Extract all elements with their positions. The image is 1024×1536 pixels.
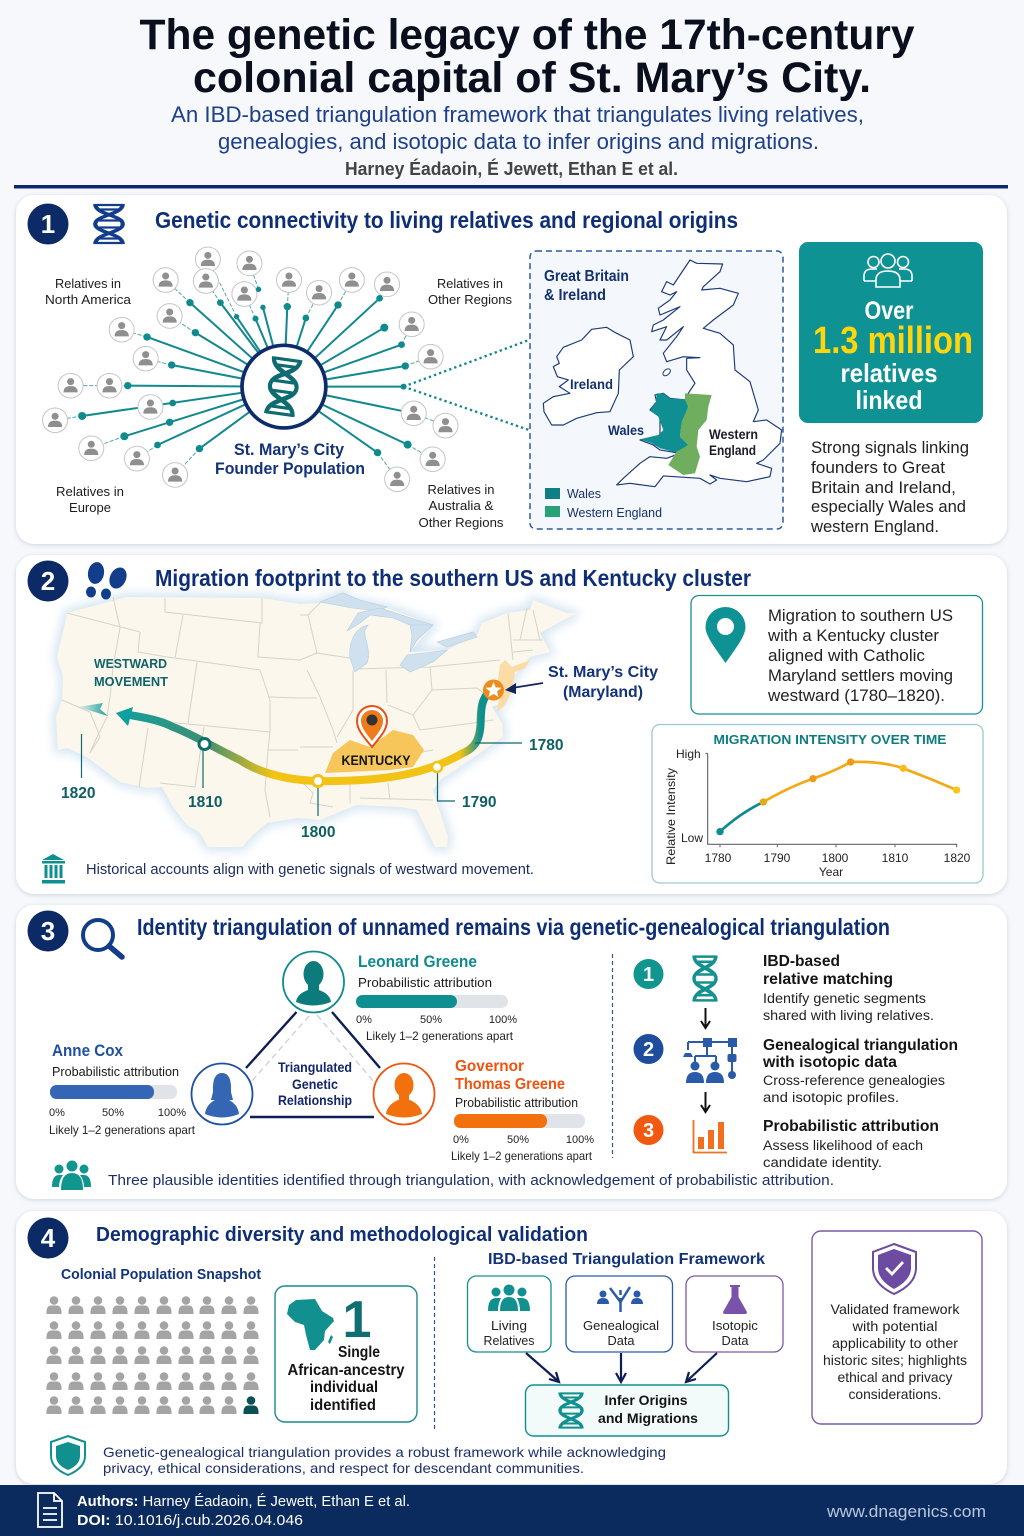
chart axis labels: 1810 (882, 851, 909, 865)
step 3 badge (634, 1115, 664, 1145)
heading 4: Demographic diversity and methodological validation (96, 1223, 588, 1246)
westward label (94, 657, 168, 689)
callout text: westward (1780–1820). (767, 687, 945, 705)
map legend (545, 487, 662, 520)
St Mary's City label: (Maryland) (563, 684, 643, 701)
candidate: Governor Thomas Greene: Thomas Greene (455, 1076, 565, 1093)
triangle label: Triangulated (278, 1059, 352, 1075)
founder label: St. Mary’s City (234, 440, 345, 459)
icon: teal dna (694, 956, 716, 1002)
label: Europe: Europe (69, 500, 111, 515)
step 1 text (763, 953, 934, 1023)
header (140, 11, 915, 179)
triangle label: Genetic (292, 1076, 338, 1092)
leader lines (82, 734, 522, 816)
stat text: linked (856, 385, 922, 415)
portrait: Anne Cox (192, 1064, 252, 1124)
finding text 1: western England. (810, 518, 939, 536)
icon: magnifier (83, 920, 122, 957)
icon: location pin (706, 607, 746, 663)
citation: Authors: Harney Éadaoin, É Jewett, Ethan E et al. (77, 1493, 410, 1510)
stat card (799, 242, 983, 423)
arrow to St Mary's City (512, 683, 543, 688)
step 2 text (762, 1037, 958, 1105)
icon: shield check (873, 1244, 916, 1294)
heading 1: Genetic connectivity to living relatives and regional origins (155, 207, 738, 233)
map labels (570, 376, 644, 438)
label: Australia: Other Regions (418, 515, 504, 530)
footer (0, 1485, 1024, 1536)
validation text: ethical and privacy (838, 1370, 953, 1385)
citation: DOI: 10.1016/j.cub.2026.04.046 (77, 1513, 303, 1529)
stat text (813, 297, 973, 415)
steps (634, 953, 958, 1170)
box: isotopic data: Data (722, 1334, 749, 1348)
validation text: Validated framework (830, 1302, 960, 1317)
candidate: Anne Cox: 100% (158, 1107, 186, 1119)
chart axis labels: 1790 (764, 851, 791, 865)
icon: bar chart (694, 1120, 727, 1152)
map: United States (56, 593, 577, 847)
step 2 text: Cross-reference genealogies (763, 1073, 945, 1088)
stat text: relatives (840, 358, 938, 388)
label: North America (45, 276, 132, 307)
label: Australia (418, 482, 504, 530)
icon: document (38, 1493, 62, 1527)
title: colonial capital of St. Mary’s City. (193, 54, 871, 102)
candidate: Anne Cox (49, 1042, 196, 1137)
validation text (823, 1302, 967, 1402)
icon: group (52, 1160, 91, 1190)
validation text: applicability to other (832, 1336, 958, 1351)
number badge 1 (28, 204, 68, 244)
founder label: Founder Population (215, 459, 365, 478)
subtitle: genealogies, and isotopic data to infer origins and migrations. (218, 129, 819, 154)
subtitle (171, 102, 864, 154)
network diagram (43, 247, 529, 492)
step 2 badge: 2 (643, 1039, 654, 1061)
candidate: Governor Thomas Greene: Probabilistic attribution (455, 1096, 578, 1110)
step 1 badge (634, 959, 664, 989)
validation text: historic sites; highlights (823, 1353, 967, 1368)
map: Great Britain and Ireland (530, 251, 783, 529)
icon: teal shield (51, 1436, 85, 1475)
down arrow 1 (701, 1008, 710, 1028)
great lakes (320, 593, 477, 672)
number badge 3 (28, 910, 68, 952)
heading 2: Migration footprint to the southern US and Kentucky cluster (155, 565, 751, 591)
closing note: Genetic-genealogical triangulation provides a robust framework while acknowledging (103, 1444, 666, 1460)
finding text 1: Britain and Ireland, (811, 479, 956, 497)
portrait: Leonard Greene (283, 952, 344, 1012)
step 3 badge: 3 (643, 1120, 654, 1142)
step 3 text: candidate identity. (763, 1155, 882, 1170)
callout text (767, 607, 953, 705)
box: infer origins: and Migrations (598, 1410, 698, 1426)
chart axis labels (664, 747, 971, 879)
title: The genetic legacy of the 17th-century (140, 11, 915, 59)
kentucky label: KENTUCKY (342, 752, 411, 768)
icon: star marker (483, 680, 504, 700)
number badge 3: 3 (41, 916, 55, 946)
callout text: Maryland settlers moving (768, 667, 953, 685)
callout: migration (691, 596, 982, 714)
callout text: aligned with Catholic (768, 647, 925, 665)
kentucky state (325, 730, 424, 773)
candidate: Governor Thomas Greene: Governor (455, 1058, 524, 1075)
chart axis labels: 1780 (705, 851, 732, 865)
callout text: Single (338, 1344, 380, 1361)
callout text: with a Kentucky cluster (767, 627, 940, 645)
big number one: 1 (343, 1291, 371, 1349)
year labels (61, 737, 563, 841)
label: Europe (56, 484, 124, 515)
number badge 1: 1 (41, 209, 55, 239)
icon: footprints (86, 561, 130, 600)
step 3 text (763, 1118, 939, 1170)
portrait: Governor Thomas Greene (374, 1064, 434, 1124)
box: living relatives (468, 1276, 551, 1352)
panel 2: migration (16, 555, 1007, 894)
number badge 2 (28, 560, 68, 602)
candidate: Governor Thomas Greene: 0% (453, 1134, 469, 1146)
label: Other Regions: Other Regions (428, 292, 512, 307)
map labels: Wales (608, 422, 644, 438)
candidate: Anne Cox: Likely 1–2 generations apart (49, 1123, 196, 1137)
step 1 text: relative matching (763, 971, 893, 988)
box: living relatives: Living (491, 1319, 527, 1333)
step 1 badge: 1 (643, 964, 654, 986)
route nodes (199, 738, 442, 786)
map legend: Wales (567, 487, 601, 501)
map title: & Ireland (544, 287, 606, 304)
step 2 text: Genealogical triangulation (763, 1037, 958, 1054)
label: Other Regions: Relatives in (437, 276, 503, 291)
triangulation note: Three plausible identities identified through triangulation, with acknowledgement of probabilistic attribution. (108, 1172, 834, 1189)
step 1 text: shared with living relatives. (763, 1008, 934, 1023)
candidate: Anne Cox: Probabilistic attribution (52, 1065, 179, 1079)
candidate: Anne Cox: 0% (49, 1107, 65, 1119)
closing note: privacy, ethical considerations, and respect for descendant communities. (103, 1460, 584, 1476)
number badge 4 (28, 1218, 68, 1258)
box: genealogical data: Genealogical (583, 1319, 659, 1333)
stat text: 1.3 million (813, 320, 973, 362)
subtitle: An IBD-based triangulation framework that triangulates living relatives, (171, 102, 864, 127)
down arrow 2 (701, 1092, 710, 1112)
label: Australia: Relatives in (428, 482, 494, 497)
candidate: Governor Thomas Greene (451, 1058, 594, 1163)
line chart: migration intensity (652, 724, 983, 883)
framework title: IBD-based Triangulation Framework (488, 1251, 765, 1268)
year labels: 1780 (529, 737, 563, 754)
triangle label (278, 1059, 352, 1108)
number badge 4: 4 (41, 1223, 56, 1253)
map title (544, 268, 629, 304)
panel 4: demographic diversity (16, 1211, 1007, 1484)
panel 1: genetic connectivity (16, 195, 1007, 544)
westward label: WESTWARD (94, 657, 167, 671)
box: infer origins: Infer Origins (604, 1392, 688, 1408)
step 2 text: with isotopic data (762, 1054, 897, 1071)
map title: Great Britain (544, 268, 629, 285)
maryland region (497, 660, 530, 712)
validation text: with potential (851, 1319, 938, 1334)
icon: museum (42, 854, 65, 884)
founder label (215, 440, 365, 478)
callout: validated framework (812, 1231, 982, 1424)
candidate: Governor Thomas Greene: 50% (507, 1134, 529, 1146)
snapshot title: Colonial Population Snapshot (61, 1267, 261, 1283)
map: Great Britain and Ireland: England (709, 443, 756, 458)
title (140, 11, 915, 102)
icon: family tree (683, 1038, 737, 1083)
candidate: Leonard Greene (356, 953, 517, 1043)
candidate: Governor Thomas Greene: Likely 1–2 generations apart (451, 1149, 593, 1163)
authors: Harney Éadaoin, É Jewett, Ethan E et al. (345, 158, 678, 179)
flow diagram: framework (468, 1251, 783, 1436)
box: genealogical data: Data (608, 1334, 635, 1348)
icon: people (864, 254, 912, 287)
finding text 1: Strong signals linking (811, 439, 969, 457)
triangle label: Relationship (278, 1092, 352, 1108)
candidate: Leonard Greene: Likely 1–2 generations apart (366, 1029, 514, 1043)
callout: African ancestry (275, 1286, 417, 1422)
pictogram: population (46, 1296, 259, 1414)
arrows into inference (526, 1353, 717, 1382)
map labels: Ireland (570, 376, 613, 392)
callout text: Migration to southern US (768, 607, 953, 625)
candidate: Leonard Greene: 50% (420, 1014, 442, 1026)
candidate: Anne Cox: Anne Cox (52, 1042, 124, 1060)
heading 3: Identity triangulation of unnamed remains via genetic-genealogical triangulation (137, 914, 890, 940)
icon: kentucky pin (357, 706, 387, 747)
chart axis labels: 1820 (944, 851, 971, 865)
step 3 text: Probabilistic attribution (763, 1118, 939, 1135)
callout text (288, 1344, 405, 1414)
finding text 1: founders to Great (811, 459, 945, 477)
closing note (103, 1444, 666, 1476)
chart axis labels: 1800 (822, 851, 849, 865)
step 1 text: IBD-based (763, 953, 840, 970)
finding text 1: especially Wales and (811, 498, 966, 516)
St Mary's City label: St. Mary’s City (548, 664, 658, 681)
St Mary's City label (548, 664, 658, 701)
year labels: 1810 (188, 794, 222, 811)
box: isotopic data: Isotopic (712, 1319, 758, 1333)
chart axis labels: High (676, 747, 701, 761)
panel 3: identity triangulation (16, 905, 1007, 1199)
box: living relatives: Relatives (484, 1334, 534, 1348)
year labels: 1790 (462, 794, 496, 811)
callout text: African-ancestry (288, 1362, 405, 1379)
candidate: Leonard Greene: 100% (489, 1014, 517, 1026)
stat text: Over (864, 297, 914, 325)
triangle diagram (192, 952, 434, 1124)
citation (77, 1493, 410, 1529)
label: Australia: Australia & (428, 498, 494, 513)
historical note: Historical accounts align with genetic signals of westward movement. (86, 862, 534, 878)
label: North America: Relatives in (55, 276, 121, 291)
label: Europe: Relatives in (56, 484, 124, 499)
box: infer origins (526, 1385, 728, 1436)
step 1 text: Identify genetic segments (763, 991, 926, 1006)
chart axis labels: Year (819, 865, 843, 879)
callout text: individual (310, 1379, 378, 1396)
website: www.dnagenics.com (826, 1502, 986, 1521)
box: isotopic data (686, 1276, 783, 1352)
label: Other Regions (428, 276, 512, 307)
route (130, 692, 490, 781)
year labels: 1800 (301, 824, 335, 841)
number badge 2: 2 (41, 566, 55, 596)
chart axis labels: Relative Intensity (664, 768, 678, 865)
westward ghost arrow (78, 703, 108, 716)
candidate: Governor Thomas Greene: 100% (566, 1134, 594, 1146)
validation text: considerations. (848, 1387, 942, 1402)
map: Great Britain and Ireland: Western (709, 427, 758, 442)
map legend: Western England (567, 506, 662, 520)
icon: Africa (287, 1299, 334, 1350)
step 2 text: and isotopic profiles. (763, 1090, 899, 1105)
westward label: MOVEMENT (94, 675, 168, 689)
box: genealogical data (566, 1276, 672, 1352)
label: North America: North America (45, 292, 132, 307)
step 3 text: Assess likelihood of each (763, 1138, 923, 1153)
finding text 1 (810, 439, 969, 536)
callout text: identified (310, 1397, 376, 1414)
map arrowhead to city (505, 683, 516, 694)
chart axis labels: Low (681, 831, 703, 845)
candidate: Leonard Greene: Leonard Greene (358, 953, 477, 971)
icon: dna (95, 204, 123, 244)
candidate: Leonard Greene: Probabilistic attribution (358, 976, 492, 990)
step 2 badge (634, 1034, 664, 1064)
year labels: 1820 (61, 785, 95, 802)
candidate: Anne Cox: 50% (102, 1107, 124, 1119)
candidate: Leonard Greene: 0% (356, 1014, 372, 1026)
chart title: MIGRATION INTENSITY OVER TIME (714, 732, 947, 747)
